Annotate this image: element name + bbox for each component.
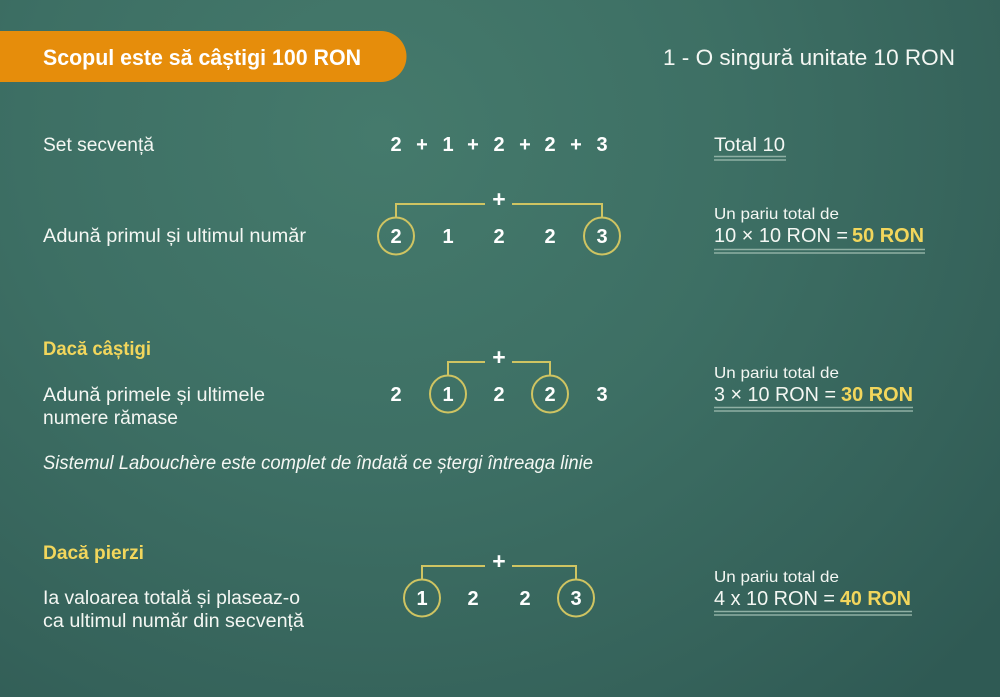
- instruction: [43, 588, 304, 632]
- sequence numbers: [390, 134, 608, 156]
- diagram: remaining numbers: [390, 344, 608, 412]
- bet total: 50 RON: 50 RON: [852, 224, 924, 247]
- bet total: 30 RON: 30 RON: [841, 383, 913, 406]
- total: Total 10: [714, 135, 785, 156]
- sequence numbers: +: [519, 134, 531, 156]
- diagram: new sequence: 2: [467, 588, 479, 610]
- heading: Dacă câștigi: [43, 339, 151, 360]
- diagram: remaining numbers: 3: [596, 384, 608, 406]
- instruction: Ia valoarea totală și plaseaz-o: [43, 588, 300, 609]
- diagram: new sequence: +: [492, 548, 506, 574]
- sequence numbers: +: [570, 134, 582, 156]
- instruction: ca ultimul număr din secvență: [43, 611, 304, 632]
- bet total: 30 RON: 3 × 10 RON =: [714, 383, 836, 406]
- diagram: new sequence: [404, 548, 594, 616]
- bet total: 40 RON: [714, 569, 912, 615]
- bet total: 50 RON: Un pariu total de: [714, 206, 839, 223]
- diagram: first and last: 3: [596, 226, 608, 248]
- bet total: 30 RON: Un pariu total de: [714, 365, 839, 382]
- row: set sequence: [43, 134, 786, 160]
- diagram: remaining numbers: 2: [493, 384, 505, 406]
- banner title: Scopul este să câștigi 100 RON: [43, 45, 361, 70]
- bet total: 40 RON: Un pariu total de: [714, 569, 839, 586]
- section: if you lose: [43, 543, 912, 632]
- diagram: remaining numbers: +: [492, 344, 506, 370]
- diagram: remaining numbers: 1: [442, 384, 454, 406]
- bet total: 40 RON: 4 x 10 RON =: [714, 587, 835, 610]
- sequence numbers: 1: [442, 134, 454, 156]
- bet total: 30 RON: [714, 365, 913, 411]
- bet total: 50 RON: 10 × 10 RON =: [714, 224, 848, 247]
- bet total: 40 RON: 40 RON: [840, 587, 911, 610]
- section: if you win: [43, 339, 913, 474]
- sequence numbers: 2: [390, 134, 402, 156]
- orange banner shape: [0, 31, 407, 82]
- italic note: Sistemul Labouchère este complet de îndată ce ștergi întreaga linie: [43, 453, 593, 474]
- instruction: Adună primele și ultimele: [43, 385, 265, 406]
- diagram: first and last: 2: [390, 226, 402, 248]
- sequence numbers: 2: [544, 134, 556, 156]
- diagram: new sequence: 2: [519, 588, 531, 610]
- instruction: Adună primul și ultimul număr: [43, 226, 307, 247]
- sequence label: Set secvență: [43, 135, 154, 156]
- sequence numbers: 2: [493, 134, 505, 156]
- sequence numbers: +: [467, 134, 479, 156]
- diagram: first and last: 2: [544, 226, 556, 248]
- unit note: 1 - O singură unitate 10 RON: [663, 45, 955, 70]
- sequence numbers: 3: [596, 134, 608, 156]
- diagram: first and last: +: [492, 186, 506, 212]
- header banner: [0, 31, 407, 82]
- diagram: new sequence: 1: [416, 588, 428, 610]
- instruction: [43, 385, 265, 429]
- heading: Dacă pierzi: [43, 543, 144, 564]
- row: add first and last: [43, 186, 925, 254]
- diagram: first and last: [378, 186, 620, 254]
- diagram: remaining numbers: 2: [544, 384, 556, 406]
- diagram: first and last: 2: [493, 226, 505, 248]
- diagram: remaining numbers: 2: [390, 384, 402, 406]
- diagram: new sequence: 3: [570, 588, 582, 610]
- diagram: first and last: 1: [442, 226, 454, 248]
- instruction: numere rămase: [43, 408, 178, 429]
- sequence numbers: +: [416, 134, 428, 156]
- bet total: 50 RON: [714, 206, 925, 253]
